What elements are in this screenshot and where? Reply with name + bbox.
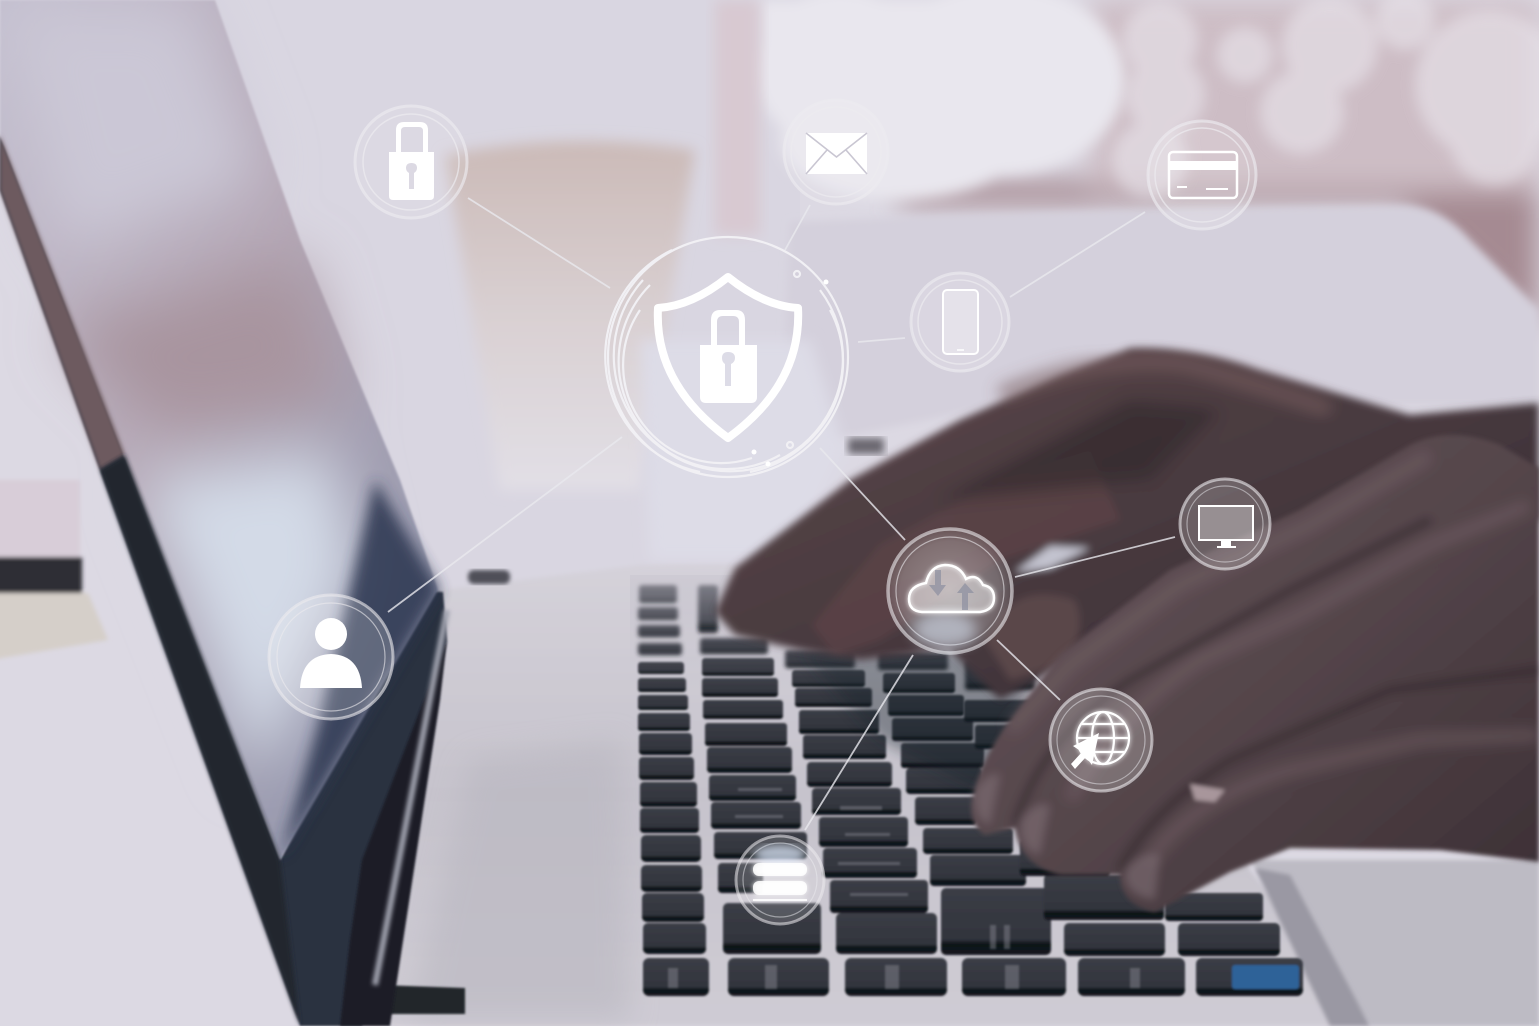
connector lines	[388, 198, 1175, 830]
lid: screen	[0, 0, 438, 860]
background: white cloud blur	[755, 0, 1125, 200]
keyboard: key legends	[668, 788, 1140, 989]
lid: hinge foot	[375, 985, 465, 1014]
lid: lower dark edge	[100, 455, 300, 1026]
icon: email node	[784, 100, 888, 204]
lid: dark right corner	[280, 480, 440, 860]
icon: monitor node	[1180, 479, 1270, 569]
lid: brown edge	[0, 135, 125, 470]
hands	[715, 348, 1539, 912]
icon: cloud transfer node	[888, 529, 1012, 653]
icon: user node	[269, 595, 393, 719]
keys: column 1	[638, 662, 709, 996]
lower hand	[971, 435, 1539, 912]
background: white table surface	[780, 205, 1539, 450]
fingertip highlight	[975, 774, 1160, 900]
background: coffee cup	[445, 141, 695, 490]
icon: globe with cursor node	[1050, 689, 1152, 791]
finger shadow lines	[1015, 520, 1539, 870]
background: glass	[640, 340, 845, 560]
keys: column 2	[702, 658, 829, 996]
background: book stack	[0, 480, 108, 660]
lid: screen reflections	[0, 0, 360, 780]
blue shift key	[1232, 965, 1299, 989]
icon: credit card node	[1148, 121, 1256, 229]
shield outline	[658, 277, 798, 438]
laptop lid	[0, 0, 465, 1026]
white cuff glimpse between fingers	[1015, 546, 1090, 572]
icon: smartphone node	[911, 273, 1009, 371]
keyboard: top fade	[630, 575, 1060, 695]
keys: column 3	[792, 670, 947, 996]
upper hand	[715, 348, 1539, 700]
keys: column 4	[883, 673, 1066, 996]
icon: central shield with lock	[605, 237, 848, 477]
keyboard	[638, 585, 1303, 996]
icon: server node	[736, 836, 824, 924]
keyboard: shaded area beneath fingers	[800, 650, 1040, 800]
base shading	[410, 740, 630, 1020]
background: pink distant table band	[900, 0, 1539, 330]
finger highlights	[1010, 455, 1539, 860]
keys: top blurred rows	[638, 585, 1035, 690]
icon: padlock node	[355, 106, 467, 218]
background: bokeh lights	[1112, 0, 1539, 198]
laptop base	[360, 438, 1539, 1026]
upper hand knuckle highlight	[1000, 361, 1330, 410]
background: vase stem	[715, 0, 760, 235]
hinge notch	[468, 570, 510, 584]
lid: dark bezel	[0, 135, 447, 1026]
right palm rest edge	[1250, 860, 1539, 1026]
padlock	[700, 310, 757, 403]
keys: columns 5 and 6	[964, 700, 1303, 996]
